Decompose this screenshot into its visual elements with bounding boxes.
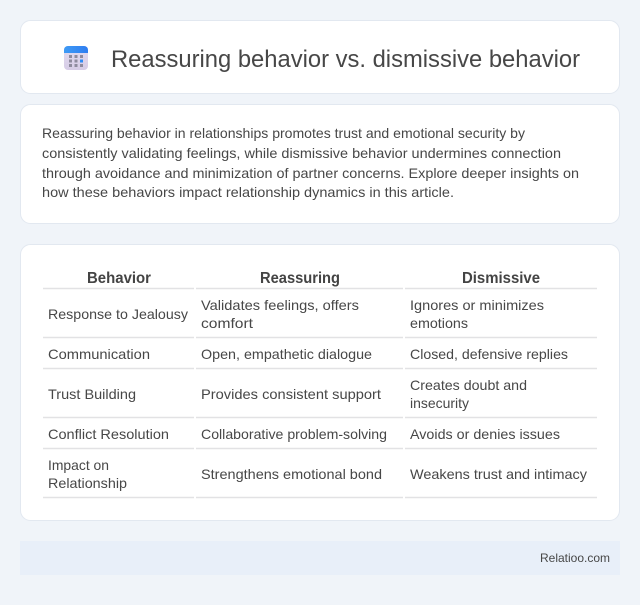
panel: introduction <box>20 104 620 224</box>
table row: response to jealousy: emotions <box>410 315 468 331</box>
table row: communication: Communication <box>48 346 150 362</box>
panel: comparison table <box>20 244 620 520</box>
table row: impact on relationship: Relationship <box>48 475 127 491</box>
table row: trust building: insecurity <box>410 395 469 411</box>
panel: title card <box>20 20 620 94</box>
table row: response to jealousy <box>43 297 597 338</box>
table row: trust building: Provides consistent support <box>201 386 381 402</box>
text block: introduction paragraph: how these behaviors impact relationship dynamics in this article. <box>42 184 454 200</box>
table header row: Behavior <box>87 270 151 287</box>
table row: trust building: Creates doubt and <box>410 377 527 393</box>
table row: conflict resolution: Collaborative problem-solving <box>201 426 387 442</box>
text block: introduction paragraph: through avoidance and minimization of partner concerns. Explore deeper insights on <box>42 165 579 181</box>
table row: impact on relationship: Weakens trust and intimacy <box>410 466 587 482</box>
table header row <box>43 270 597 288</box>
table row: impact on relationship: Strengthens emotional bond <box>201 466 382 482</box>
table header row: Dismissive <box>462 270 540 287</box>
table row: response to jealousy: Ignores or minimizes <box>410 297 544 313</box>
icon: calendar <box>64 46 88 70</box>
table row: communication: Open, empathetic dialogue <box>201 346 372 362</box>
table row: conflict resolution: Conflict Resolution <box>48 426 169 442</box>
text block: introduction paragraph: Reassuring behavior in relationships promotes trust and emotional security by <box>42 125 525 141</box>
table row: communication: Closed, defensive replies <box>410 346 568 362</box>
table row: response to jealousy: comfort <box>201 315 253 331</box>
table row: conflict resolution <box>43 426 597 448</box>
title: Reassuring behavior vs. dismissive behavior <box>111 46 580 73</box>
table header row: Reassuring <box>260 270 340 287</box>
table row: impact on relationship <box>43 457 597 498</box>
footer bar <box>20 541 620 575</box>
text block: introduction paragraph <box>42 125 579 200</box>
table row: response to jealousy: Validates feelings, offers <box>201 297 359 313</box>
table row: communication <box>43 346 597 368</box>
table row: trust building <box>43 377 597 418</box>
table row: response to jealousy: Response to Jealousy <box>48 306 188 322</box>
text block: introduction paragraph: consistently validating feelings, while dismissive behavior undermines connection <box>42 145 561 161</box>
table row: conflict resolution: Avoids or denies issues <box>410 426 560 442</box>
table row: impact on relationship: Impact on <box>48 457 109 473</box>
table row: trust building: Trust Building <box>48 386 136 402</box>
footer credit: Relatioo.com <box>540 551 610 565</box>
